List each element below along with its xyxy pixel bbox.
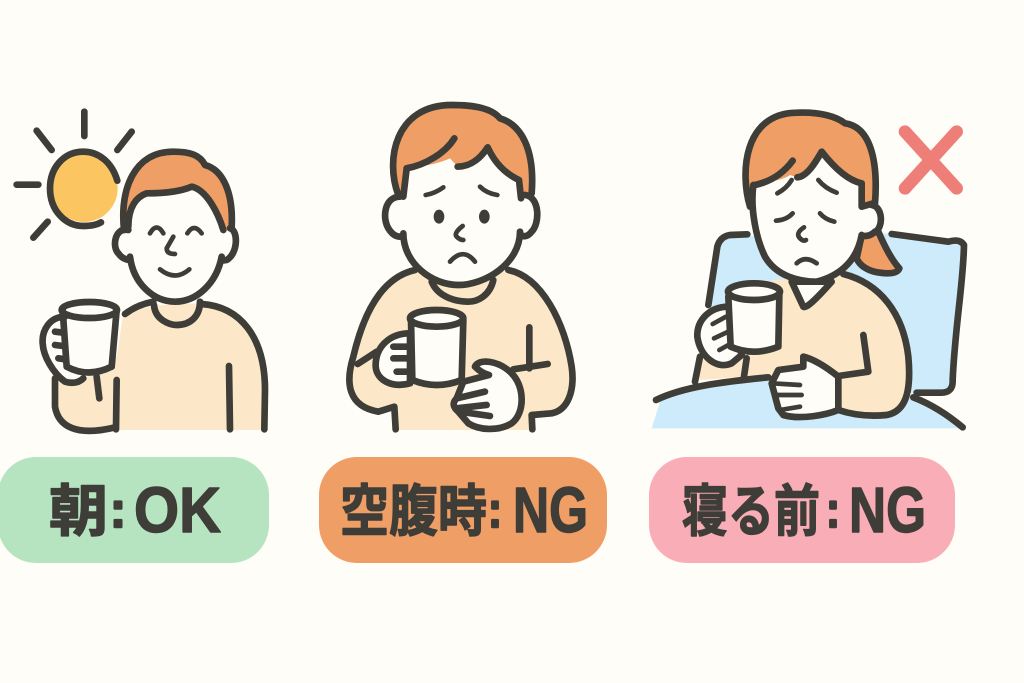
label: before sleep NG	[649, 457, 955, 563]
icon: pillow	[708, 233, 964, 393]
label: empty stomach NG: 空腹時	[340, 480, 487, 543]
collar	[154, 302, 200, 325]
head	[115, 152, 236, 302]
label: empty stomach NG: :	[488, 482, 502, 538]
label: morning OK: :	[110, 482, 126, 538]
label: before sleep NG: 寝る前	[682, 480, 820, 543]
label: morning OK: OK	[134, 474, 221, 546]
icon: mug and left hand	[697, 283, 780, 365]
icon: blanket	[652, 377, 962, 428]
label: morning OK: 朝	[49, 480, 108, 543]
sweater	[697, 275, 909, 415]
icon: mug and left hand	[376, 310, 463, 385]
icon: mug and hand	[43, 302, 117, 383]
label: morning OK	[0, 457, 269, 563]
icon: right hand	[772, 357, 838, 417]
collar	[792, 282, 832, 307]
panel: bedtime person	[652, 113, 964, 428]
icon: sun	[17, 112, 132, 238]
label: empty stomach NG: NG	[513, 474, 588, 546]
collar	[432, 280, 493, 302]
sweater	[349, 270, 572, 430]
icon: red cross	[905, 132, 957, 188]
panel: empty stomach person	[349, 105, 572, 430]
head	[746, 113, 881, 282]
icon: right hand	[454, 362, 522, 429]
head	[385, 105, 537, 285]
sleeve lines	[358, 327, 548, 369]
blanket lines	[656, 377, 963, 427]
ponytail	[857, 232, 899, 273]
label: empty stomach NG	[319, 457, 607, 563]
sweater outlines	[695, 274, 909, 416]
label: before sleep NG: :	[826, 482, 840, 538]
panel: morning person with sun	[17, 112, 265, 431]
sweater outlines	[55, 302, 265, 431]
label: before sleep NG: NG	[849, 474, 926, 546]
sweater	[55, 303, 265, 431]
